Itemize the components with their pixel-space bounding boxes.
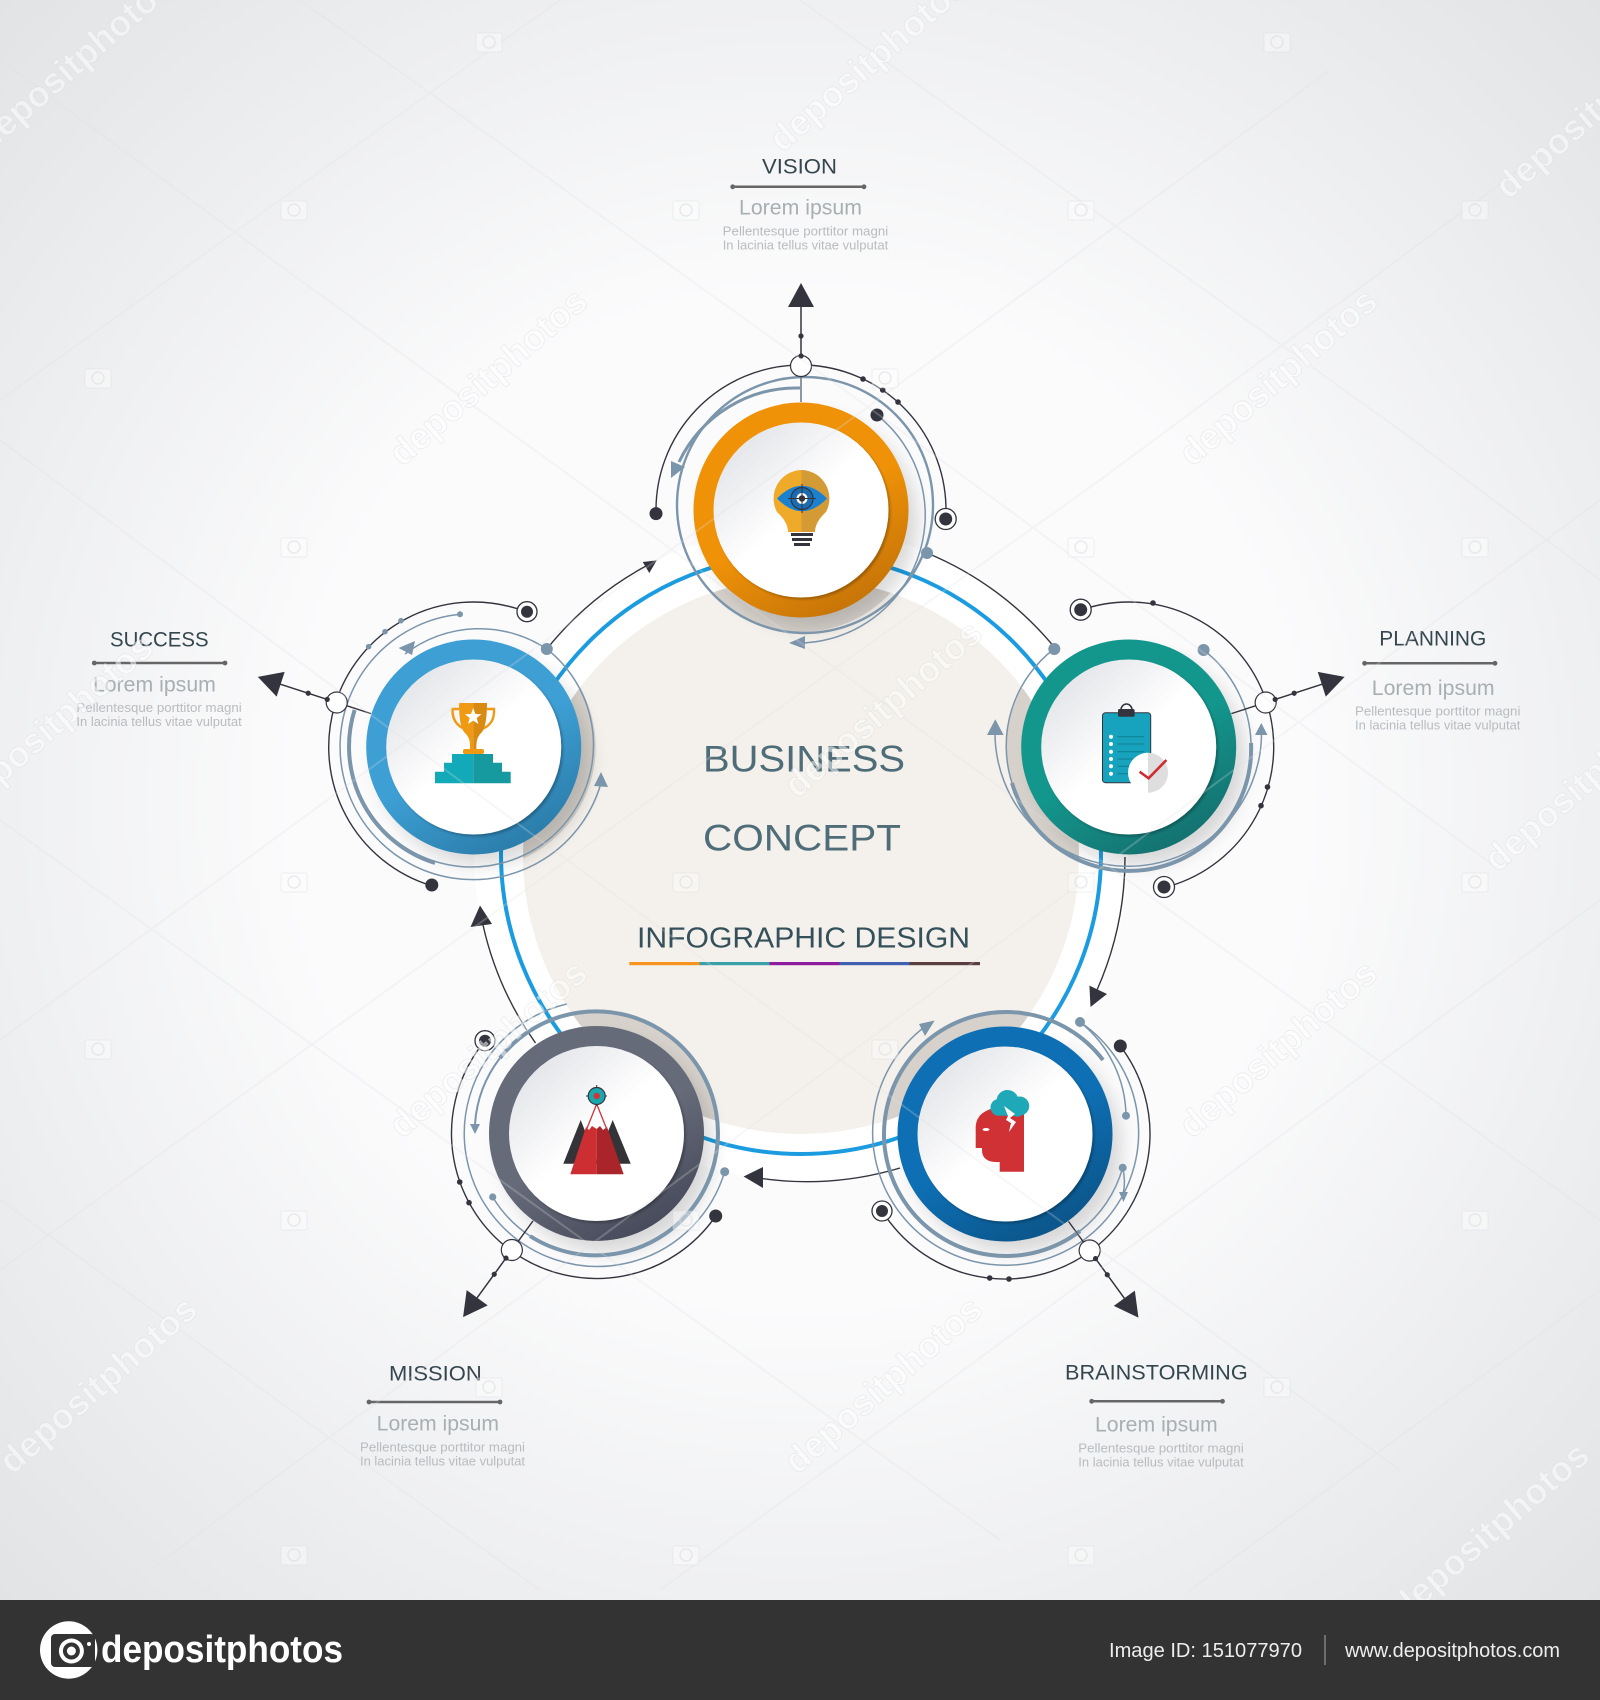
success orbit lines (293, 566, 655, 928)
label: mission: MISSION (389, 1363, 482, 1386)
label: vision: Lorem ipsum (739, 197, 862, 220)
planning orbit lines (944, 562, 1313, 932)
icon: clipboard (1102, 704, 1168, 793)
label: mission (360, 1363, 525, 1468)
label: planning: In lacinia tellus vitae vulputat (1355, 718, 1521, 733)
success pointer arrow (254, 664, 375, 726)
node: mission (450, 1003, 730, 1318)
label: mission: In lacinia tellus vitae vulputat (360, 1453, 525, 1468)
mission coloured ring (489, 1026, 704, 1241)
mission pointer arrow (453, 1213, 544, 1325)
label: vision: Pellentesque porttitor magni (723, 223, 888, 238)
connector arrows between nodes (470, 553, 1125, 1188)
vision coloured ring (694, 402, 908, 618)
node: planning (987, 598, 1344, 898)
label: success: SUCCESS (110, 629, 209, 652)
watermark overlay: depositphotos (381, 952, 595, 1145)
label: brainstorming: BRAINSTORMING (1065, 1361, 1248, 1384)
label: brainstorming: Pellentesque porttitor magni (1078, 1440, 1244, 1455)
watermark overlay: depositphotos (1171, 280, 1385, 473)
brainstorming orbit lines (802, 931, 1208, 1337)
brainstorming coloured ring (898, 1026, 1112, 1242)
footer image id: Image ID: 151077970 (1109, 1639, 1302, 1662)
label: success: Pellentesque porttitor magni (76, 700, 242, 715)
watermark overlay: depositphotos (381, 280, 595, 473)
success coloured ring (366, 640, 581, 854)
label: success (76, 629, 242, 729)
beige centre disc (523, 578, 1079, 1134)
mission orbit lines (395, 932, 798, 1335)
business text: BUSINESS (703, 739, 905, 780)
watermark overlay: depositphotos (776, 612, 990, 805)
concept text: CONCEPT (703, 818, 901, 859)
node: brainstorming (871, 1010, 1151, 1318)
label: planning (1355, 628, 1521, 733)
vision inner disc (714, 422, 888, 598)
icon: trophy on podium (435, 703, 511, 783)
icon: lightbulb eye (774, 470, 829, 546)
centre disc group (474, 527, 1128, 1181)
planning pointer arrow (1227, 664, 1349, 726)
planning inner disc (1041, 660, 1216, 834)
vision orbit lines (650, 362, 956, 658)
brainstorming inner disc (918, 1046, 1092, 1222)
footer logo wordmark: depositphotos (101, 1629, 343, 1671)
node: vision (650, 283, 956, 658)
success inner disc (386, 660, 561, 834)
label: success: Lorem ipsum (93, 674, 216, 697)
brainstorming pointer arrow (1058, 1214, 1149, 1325)
label: brainstorming (1065, 1361, 1248, 1469)
label: mission: Pellentesque porttitor magni (360, 1440, 525, 1455)
label: success: In lacinia tellus vitae vulputat (76, 714, 242, 729)
label: planning: Lorem ipsum (1372, 677, 1495, 700)
node: success (258, 601, 608, 892)
footer bar (0, 1600, 1600, 1700)
label: vision: In lacinia tellus vitae vulputat (723, 237, 889, 252)
vision pointer arrow (788, 283, 814, 402)
footer url: www.depositphotos.com (1344, 1639, 1560, 1662)
icon: mountains and target (563, 1085, 631, 1174)
label: mission: Lorem ipsum (377, 1413, 499, 1436)
planning coloured ring (1021, 640, 1236, 854)
icon: head with storm cloud (976, 1090, 1029, 1172)
mission inner disc (509, 1046, 684, 1221)
watermark overlay: depositphotos (1383, 1434, 1597, 1627)
label: vision: VISION (762, 156, 837, 179)
watermark overlay: depositphotos (1171, 952, 1385, 1145)
label: planning: Pellentesque porttitor magni (1355, 704, 1521, 719)
blue connecting ring (501, 554, 1101, 1154)
multicolour underline (629, 962, 980, 965)
infographic design text: INFOGRAPHIC DESIGN (637, 923, 970, 955)
footer logo icon (40, 1621, 97, 1679)
centre heading (629, 739, 980, 965)
label: brainstorming: Lorem ipsum (1095, 1414, 1218, 1437)
label: vision (723, 156, 889, 252)
watermark overlay: depositphotos (776, 1288, 990, 1481)
label: planning: PLANNING (1379, 628, 1486, 651)
label: brainstorming: In lacinia tellus vitae vulputat (1078, 1454, 1244, 1469)
